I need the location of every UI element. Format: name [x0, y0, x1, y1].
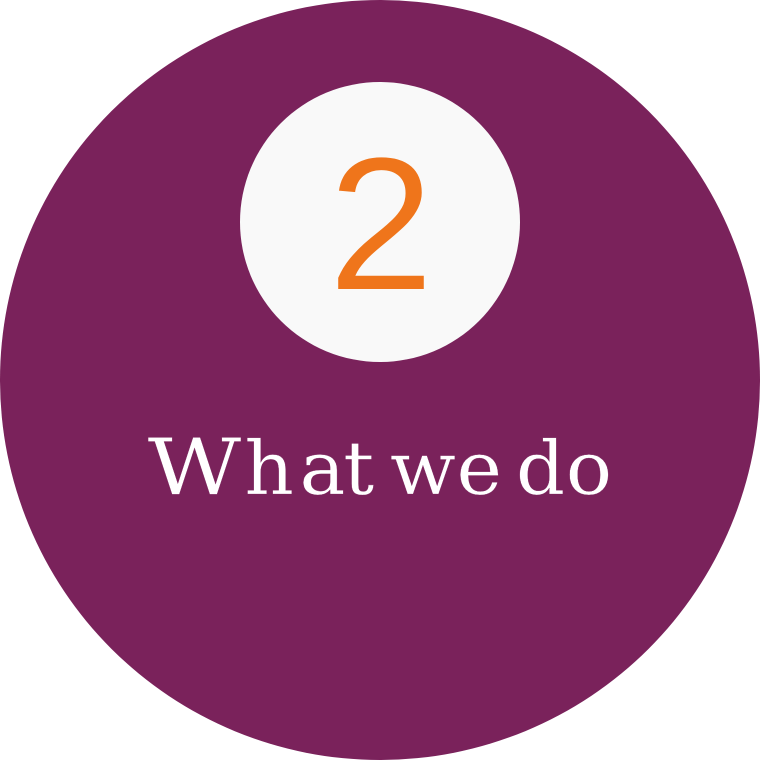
- inner white circle: [240, 82, 520, 362]
- heading: What we do: [148, 421, 612, 513]
- number 2: 2: [328, 118, 434, 330]
